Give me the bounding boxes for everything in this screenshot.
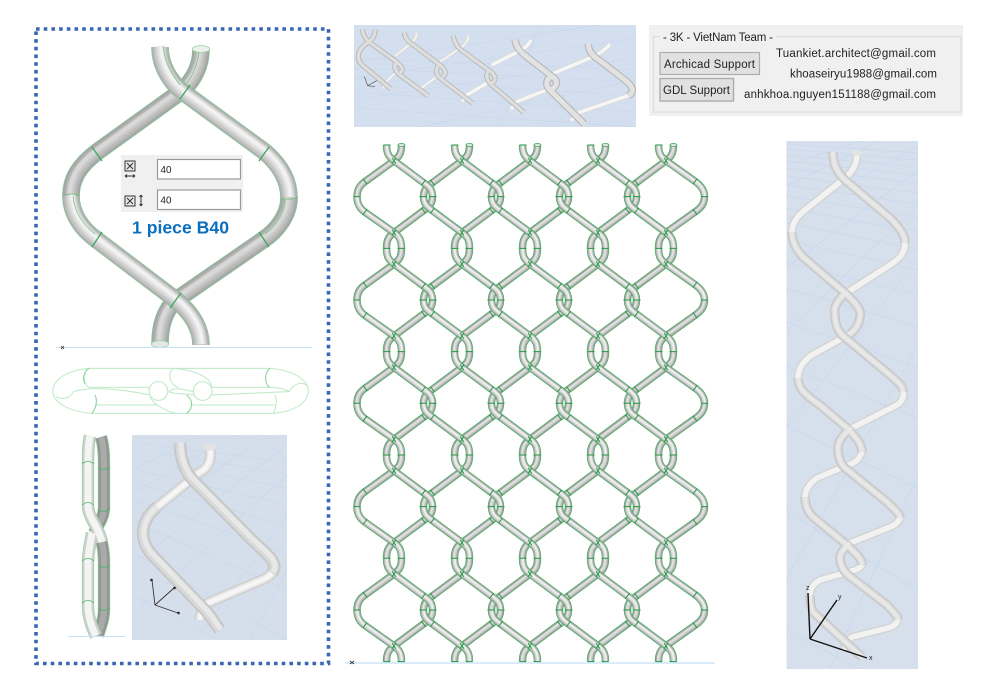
- axes: [806, 585, 873, 662]
- panel: tall 3D view of a single wire pair: [786, 141, 918, 669]
- axes: y: [838, 594, 842, 601]
- email 2: khoaseiryu1988@gmail.com: [790, 68, 937, 80]
- mesh wires: [354, 126, 708, 680]
- wire tubes: [792, 150, 905, 657]
- label: 1 piece B40: 1 piece B40: [132, 218, 229, 238]
- panel: single B40 piece, dotted frame: [36, 29, 328, 664]
- base line: [56, 346, 312, 349]
- grid lines: [354, 25, 636, 127]
- grid lines: [132, 435, 287, 640]
- mesh tubes: [358, 29, 632, 124]
- team heading: - 3K - VietNam Team -: [663, 32, 773, 44]
- dotted blue frame: [36, 29, 328, 664]
- grid lines: [786, 141, 918, 669]
- front view of one B40 piece: [62, 46, 298, 347]
- button: GDL Support: [660, 78, 734, 101]
- side view of piece: [68, 436, 125, 636]
- panel: 3K VietNam team contacts: [649, 25, 963, 116]
- group frame: [654, 36, 961, 112]
- tube: [143, 442, 275, 630]
- axes: x: [869, 655, 873, 662]
- 3D view of piece on blue grid: [132, 435, 287, 640]
- button: Archicad Support: [660, 52, 760, 74]
- panel: 3D perspective view of the mesh: [354, 25, 636, 127]
- base line: [345, 661, 715, 664]
- icon: vertical spacing: [125, 195, 142, 206]
- size input panel: [121, 155, 243, 212]
- axes: z: [806, 585, 810, 592]
- email 3: anhkhoa.nguyen151188@gmail.com: [744, 89, 936, 101]
- email 1: Tuankiet.architect@gmail.com: [776, 48, 936, 60]
- wire end caps: [398, 143, 677, 147]
- button: GDL Support: GDL Support: [663, 85, 731, 97]
- input: width 40: 40: [160, 165, 172, 176]
- top view wireframe: [53, 368, 308, 413]
- button: Archicad Support: Archicad Support: [664, 59, 756, 71]
- axes: [151, 579, 179, 614]
- input: height 40: 40: [160, 196, 172, 206]
- panel: front view of chain link mesh: [345, 126, 715, 680]
- icon: horizontal spacing: [125, 161, 135, 178]
